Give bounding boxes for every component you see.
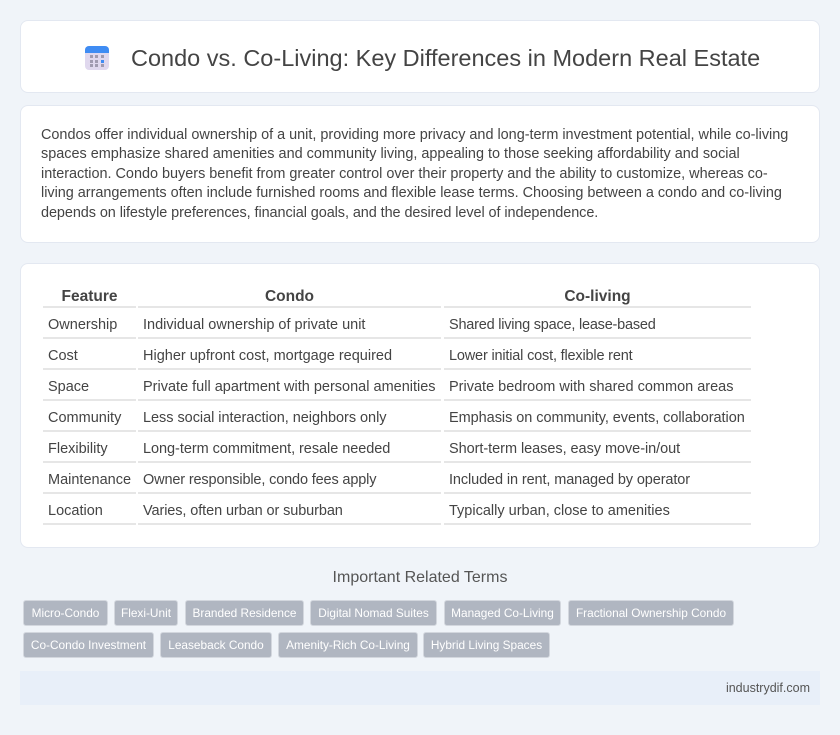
footer credit: industrydif.com: [726, 681, 810, 695]
comparison table: Flexibility: [48, 441, 108, 457]
summary text: [41, 127, 788, 221]
comparison table: Varies, often urban or suburban: [143, 503, 343, 519]
related term tags: Amenity-Rich Co-Living: [286, 638, 410, 652]
panel: summary: [20, 105, 820, 243]
comparison table: Short-term leases, easy move-in/out: [449, 441, 680, 457]
comparison table: Less social interaction, neighbors only: [143, 410, 386, 426]
comparison table: Lower initial cost, flexible rent: [449, 348, 632, 364]
footer bar: [20, 671, 820, 705]
comparison table: Maintenance: [48, 472, 131, 488]
related term tags: Managed Co-Living: [451, 606, 554, 620]
comparison table: Community: [48, 410, 121, 426]
heading: related terms: Important Related Terms: [333, 569, 507, 586]
related term tags: Fractional Ownership Condo: [576, 606, 726, 620]
table header: [62, 288, 631, 305]
comparison table: Emphasis on community, events, collaboration: [449, 410, 745, 426]
table header: Co-living: [564, 288, 631, 305]
summary text: depends on lifestyle preferences, financial goals, and the desired level of independence.: [41, 205, 598, 221]
comparison table: Space: [48, 379, 89, 395]
comparison table: Individual ownership of private unit: [143, 317, 365, 333]
title: Condo vs. Co-Living: Key Differences in Modern Real Estate: [131, 45, 760, 71]
comparison table: Typically urban, close to amenities: [449, 503, 670, 519]
comparison table: Ownership: [48, 317, 117, 333]
comparison table: Included in rent, managed by operator: [449, 472, 690, 488]
header panel: [20, 20, 820, 93]
comparison table: Private full apartment with personal amenities: [143, 379, 436, 395]
comparison table: Owner responsible, condo fees apply: [143, 472, 376, 488]
comparison table: [43, 288, 751, 525]
related term tags: [23, 600, 734, 658]
related term tags: Micro-Condo: [32, 606, 99, 620]
related term tags: Co-Condo Investment: [31, 638, 146, 652]
icon: calendar building: [85, 46, 109, 70]
comparison table: Higher upfront cost, mortgage required: [143, 348, 392, 364]
comparison table: Cost: [48, 348, 78, 364]
table header: Feature: [62, 288, 118, 305]
comparison table: Private bedroom with shared common areas: [449, 379, 734, 395]
summary text: Condos offer individual ownership of a unit, providing more privacy and long-term investment potential, while co-living: [41, 127, 788, 143]
related term tags: Flexi-Unit: [121, 606, 171, 620]
panel: comparison table: [20, 263, 820, 548]
related term tags: Hybrid Living Spaces: [431, 638, 542, 652]
related term tags: Branded Residence: [192, 606, 297, 620]
comparison table: Long-term commitment, resale needed: [143, 441, 390, 457]
summary text: living arrangements often include furnished rooms and flexible lease terms. Choosing between a condo and co-living: [41, 185, 782, 201]
comparison table: Shared living space, lease-based: [449, 317, 656, 333]
related term tags: Digital Nomad Suites: [318, 606, 429, 620]
table header: Condo: [265, 288, 314, 305]
related term tags: Leaseback Condo: [168, 638, 264, 652]
summary text: interaction. Condo buyers benefit from greater control over their property and the ability to customize, whereas co-: [41, 166, 768, 182]
summary text: spaces emphasize shared amenities and community living, appealing to those seeking affordability and social: [41, 146, 740, 162]
comparison table: Location: [48, 503, 103, 519]
